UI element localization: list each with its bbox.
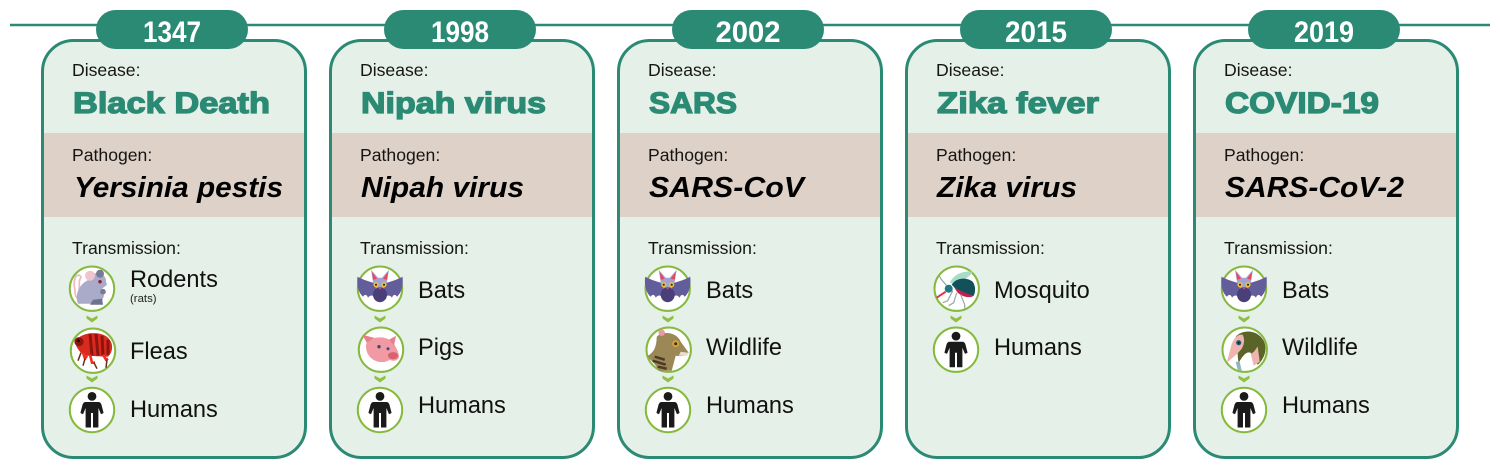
panel: 2002 SARS — [618, 10, 882, 458]
host label: Bats — [418, 278, 465, 304]
disease name: COVID-19 — [1225, 87, 1379, 120]
icon: bat — [357, 266, 403, 311]
host label: Bats — [1282, 278, 1329, 304]
arrow — [662, 376, 674, 382]
icon: human — [934, 328, 978, 372]
arrow — [86, 376, 98, 382]
year badge 2002: 2002 — [716, 16, 780, 49]
host label: Wildlife — [1282, 335, 1358, 361]
transmission label: Transmission: — [360, 238, 469, 258]
panel: 2015 Zika fever — [906, 10, 1170, 458]
pathogen label: Pathogen: — [648, 145, 728, 165]
arrow — [1238, 316, 1250, 322]
icon: rodent — [70, 266, 114, 311]
year badge 2015: 2015 — [1005, 16, 1067, 49]
disease label: Disease: — [72, 60, 140, 80]
pathogen label: Pathogen: — [360, 145, 440, 165]
arrow — [950, 316, 962, 322]
transmission label: Transmission: — [936, 238, 1045, 258]
pathogen name: SARS-CoV — [649, 172, 807, 204]
host label: Rodents — [130, 267, 218, 293]
transmission label: Transmission: — [1224, 238, 1333, 258]
transmission label: Transmission: — [648, 238, 757, 258]
disease name: Black Death — [73, 87, 270, 120]
icon: bat — [1221, 266, 1267, 311]
year badge 1347 — [96, 10, 248, 49]
arrow — [374, 376, 386, 382]
icon: mosquito — [934, 266, 979, 311]
timeline line — [10, 24, 1490, 26]
host label — [130, 267, 218, 305]
icon: pangolin — [1222, 328, 1267, 372]
year badge 2002 — [672, 10, 824, 49]
pathogen name: Nipah virus — [361, 172, 524, 204]
year badge 2019 — [1248, 10, 1400, 49]
arrow — [374, 316, 386, 322]
pathogen label: Pathogen: — [72, 145, 152, 165]
pathogen name: Yersinia pestis — [74, 172, 283, 204]
panel: 2019 COVID-19 — [1194, 10, 1458, 458]
icon: human — [1222, 388, 1266, 432]
year badge 1998: 1998 — [431, 16, 489, 49]
disease label: Disease: — [1224, 60, 1292, 80]
host label: Humans — [706, 393, 794, 419]
arrow — [86, 316, 98, 322]
pathogen label: Pathogen: — [1224, 145, 1304, 165]
arrow — [1238, 376, 1250, 382]
host label: Humans — [994, 335, 1082, 361]
icon: civet — [646, 328, 691, 372]
icon: human — [70, 388, 114, 432]
year badge 2015 — [960, 10, 1112, 49]
transmission label: Transmission: — [72, 238, 181, 258]
icon: bat — [645, 266, 690, 311]
disease label: Disease: — [360, 60, 428, 80]
host label: Fleas — [130, 339, 188, 365]
year badge 1998 — [384, 10, 536, 49]
year badge 1347: 1347 — [143, 16, 201, 49]
pathogen label: Pathogen: — [936, 145, 1016, 165]
disease name: SARS — [649, 87, 737, 120]
disease name: Zika fever — [937, 87, 1099, 120]
host label: Mosquito — [994, 278, 1090, 304]
host label: Humans — [130, 397, 218, 423]
pathogen name: SARS-CoV-2 — [1225, 172, 1404, 204]
host label: Wildlife — [706, 335, 782, 361]
panel: 1347 Black Death — [42, 10, 306, 458]
icon: human — [358, 388, 402, 432]
pathogen name: Zika virus — [936, 172, 1077, 204]
disease name: Nipah virus — [361, 87, 546, 120]
host label: Bats — [706, 278, 753, 304]
host label: (rats) — [130, 293, 157, 305]
host label: Humans — [1282, 393, 1370, 419]
arrow — [662, 316, 674, 322]
icon: pig — [359, 328, 403, 372]
disease label: Disease: — [936, 60, 1004, 80]
year badge 2019: 2019 — [1294, 16, 1354, 49]
icon: flea — [71, 328, 115, 373]
host label: Pigs — [418, 335, 464, 361]
host label: Humans — [418, 393, 506, 419]
disease label: Disease: — [648, 60, 716, 80]
icon: human — [646, 388, 690, 432]
panel: 1998 Nipah virus — [330, 10, 594, 458]
